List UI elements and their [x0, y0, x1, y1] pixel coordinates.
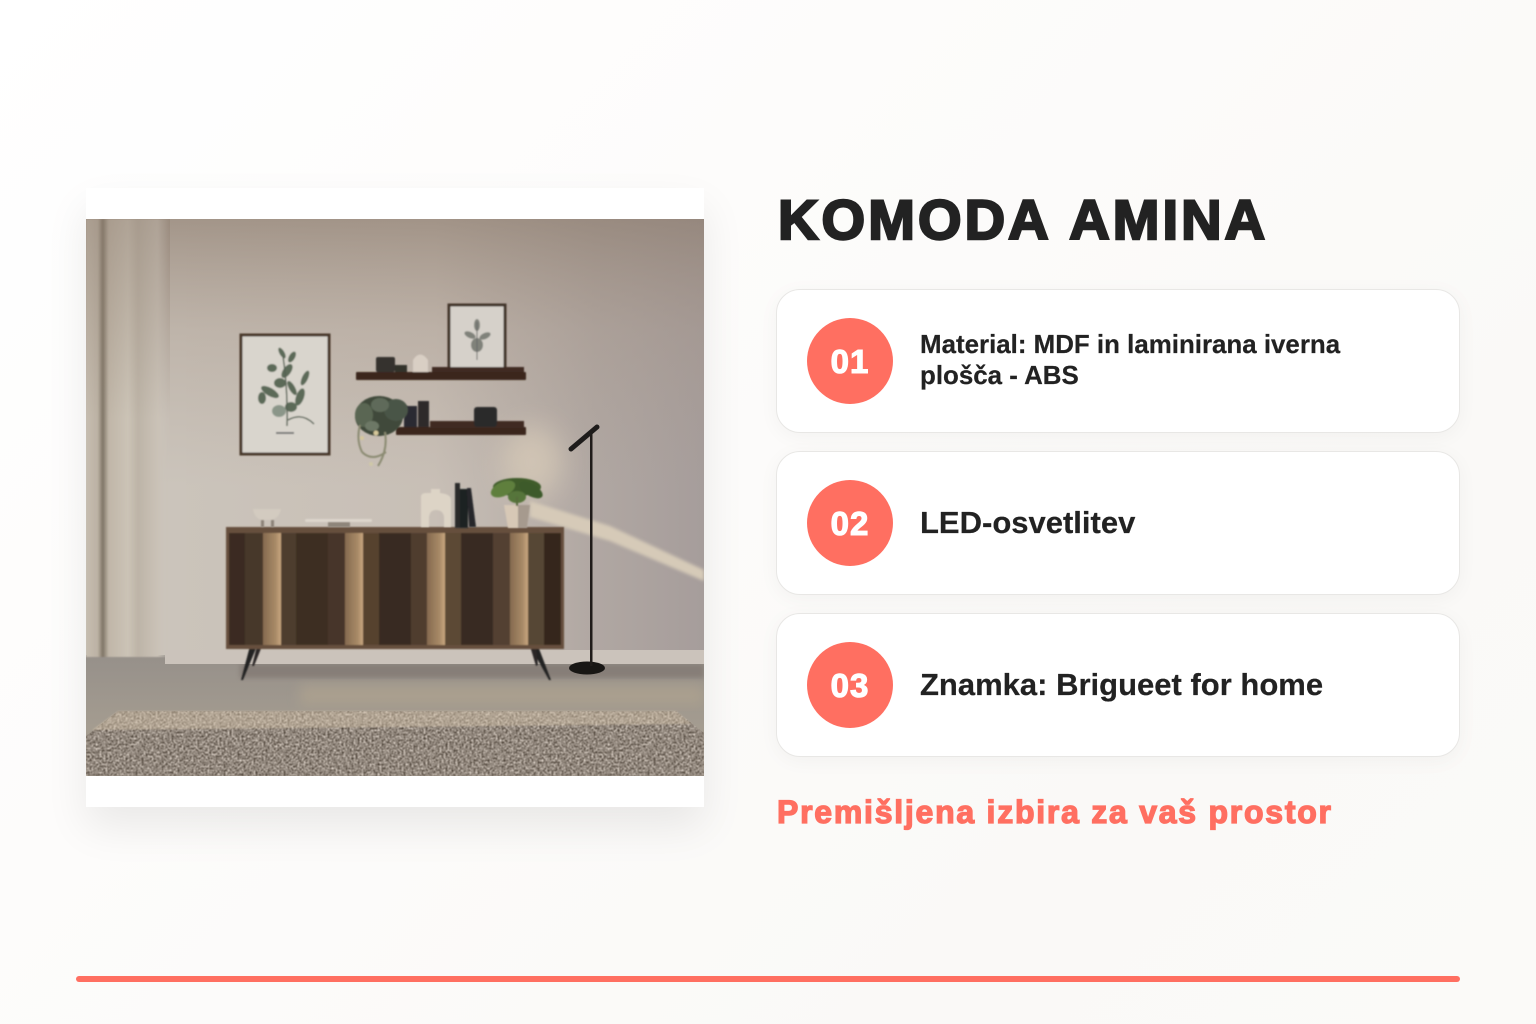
number badge 02: [807, 480, 893, 566]
panel: product photo: [86, 188, 704, 807]
feature card 01: material: [776, 289, 1460, 433]
number badge 03: 03: [831, 667, 869, 704]
wall light beam: [502, 426, 704, 581]
feature card 03: brand: [776, 613, 1460, 757]
feature text: material: plošča - ABS: [920, 362, 1079, 390]
feature text: material: [920, 331, 1340, 390]
upper shelf with small print: [356, 305, 526, 380]
lower shelf with objects: [396, 401, 526, 435]
number badge 02: 02: [831, 505, 869, 542]
baseboard: [459, 650, 704, 664]
bottom accent bar: [76, 976, 1460, 982]
feature text: material: Material: MDF in laminirana iverna: [920, 331, 1340, 359]
framed botanical print: [241, 335, 329, 454]
number badge 03: [807, 642, 893, 728]
floor lamp: [569, 427, 605, 674]
hanging plant: [355, 396, 408, 466]
number badge 01: [807, 318, 893, 404]
wall: [86, 219, 704, 664]
floor: [86, 655, 704, 776]
curtain: [86, 219, 170, 657]
sideboard: [226, 527, 564, 680]
feature text: LED lighting: LED-osvetlitev: [920, 505, 1135, 540]
tagline: Premišljena izbira za vaš prostor: [777, 794, 1333, 830]
feature card 02: LED lighting: [776, 451, 1460, 595]
number badge 01: 01: [831, 343, 869, 380]
decor on sideboard: [253, 477, 545, 528]
feature text: brand: Znamka: Brigueet for home: [920, 667, 1323, 702]
title: KOMODA AMINA: [778, 188, 1268, 251]
rug: [86, 711, 704, 776]
